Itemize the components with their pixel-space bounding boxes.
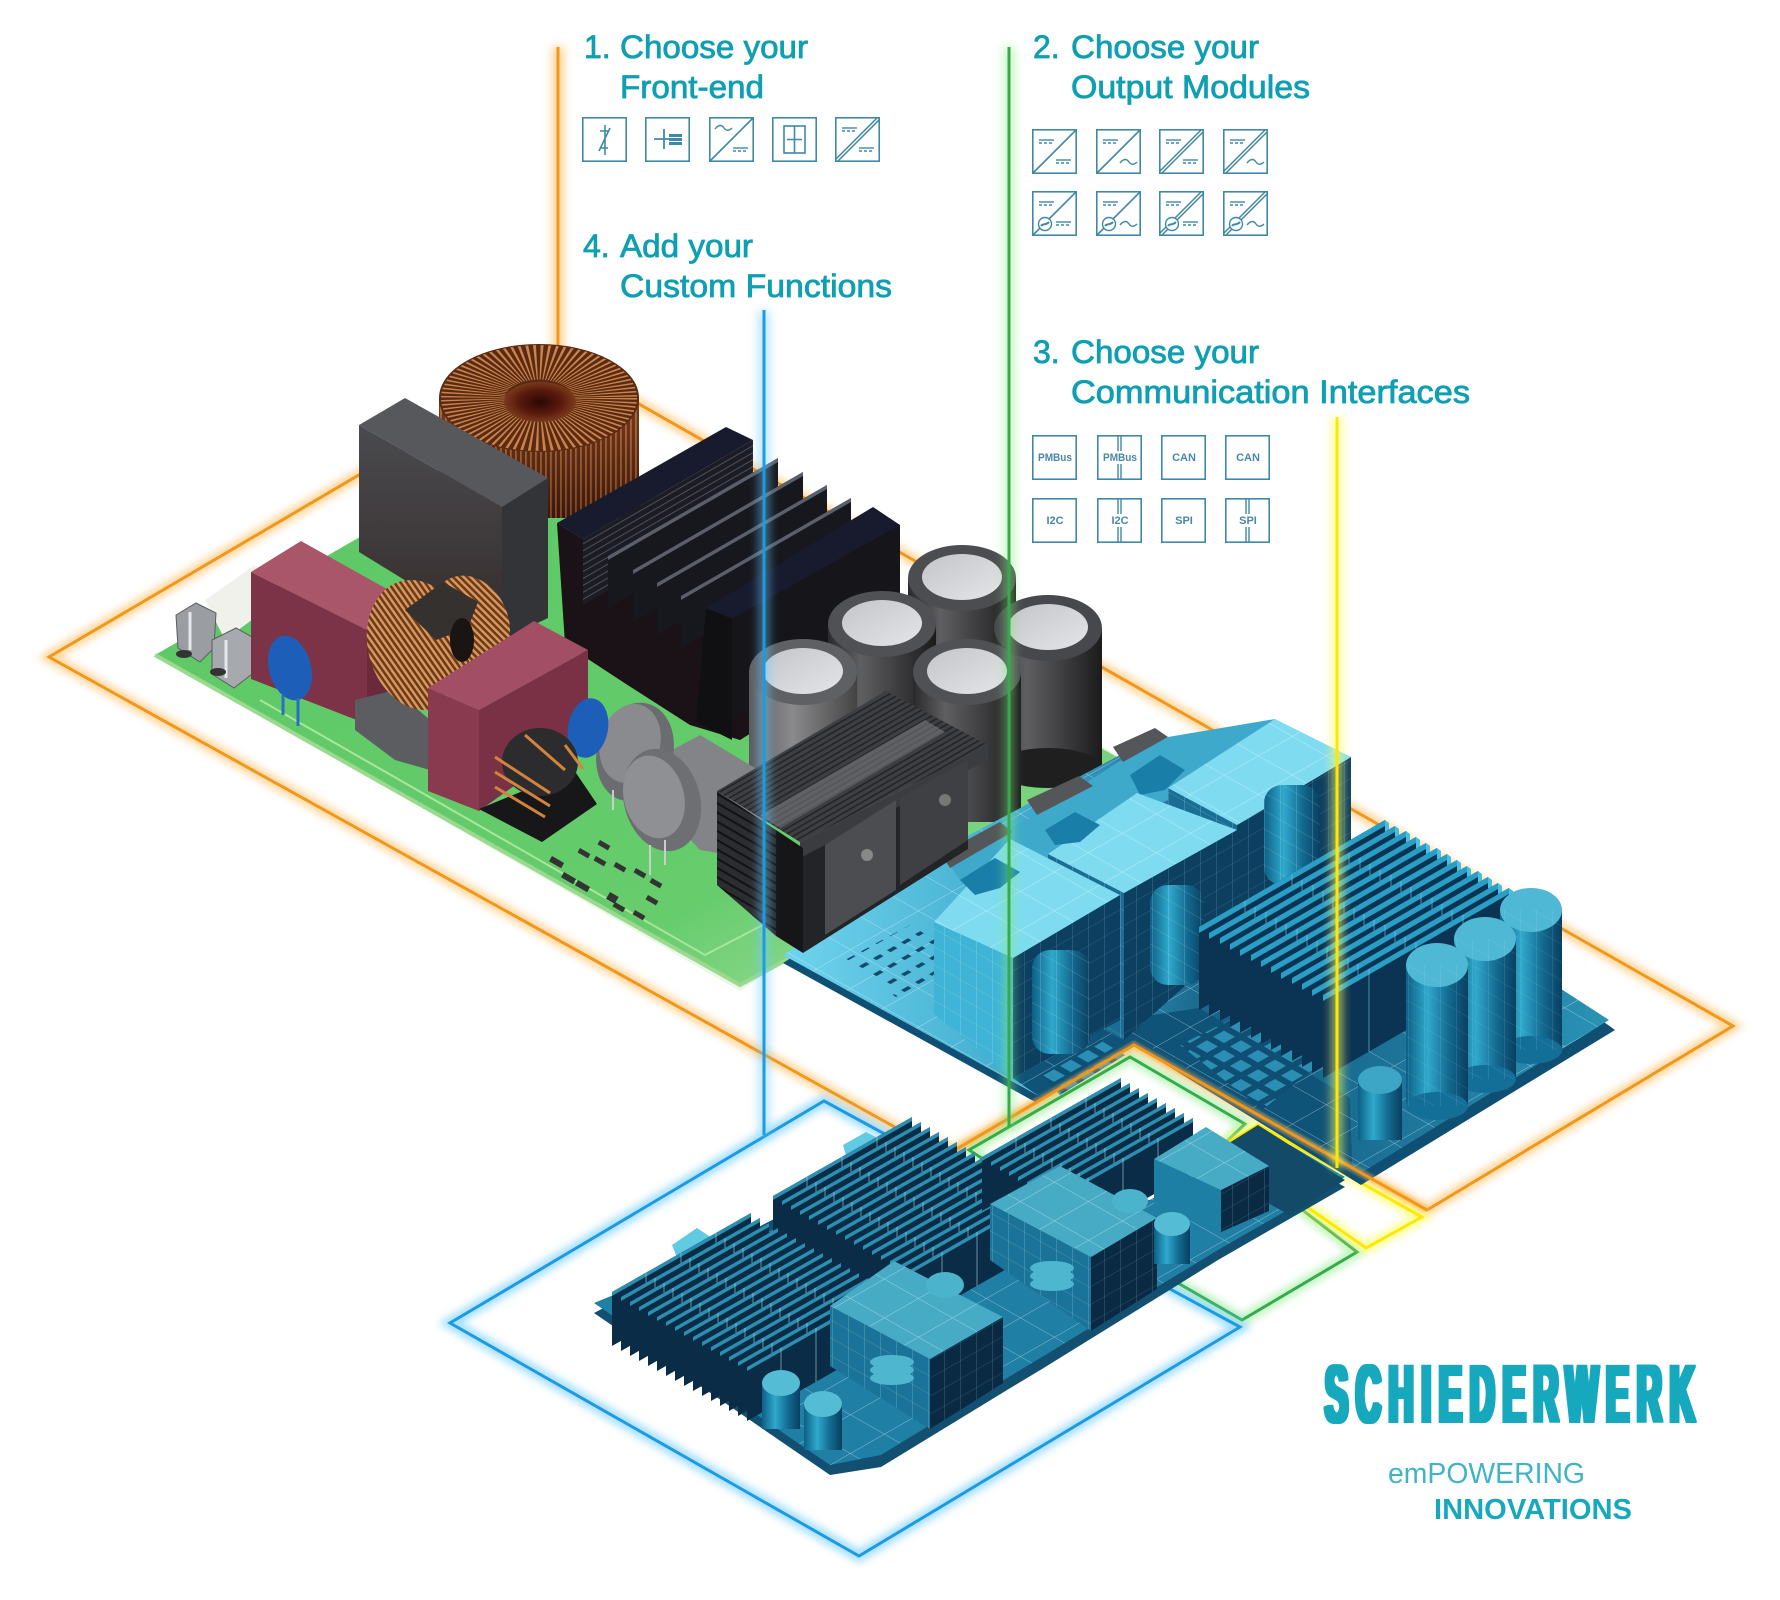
heading 2: 2.: [1033, 29, 1060, 65]
icon: DC/AC: [1097, 130, 1140, 173]
icon: SPI: [1162, 499, 1205, 542]
capacitor tall right: [994, 595, 1102, 788]
heading 3: 3.: [1033, 334, 1060, 370]
heading 3: [1033, 334, 1470, 410]
blue wireframe block C: [1130, 719, 1351, 980]
icon: capacitor and battery: [646, 118, 689, 161]
heading 4: [583, 228, 892, 304]
icon: DC/AC with galvanic symbol: [1097, 192, 1140, 235]
grey rear strips: [941, 728, 1168, 868]
icon: isolated CAN: [1226, 436, 1269, 479]
heading 1: 1.: [584, 29, 611, 65]
small cube components on blue board: [1180, 1005, 1325, 1110]
icon: isolated DC/AC: [1224, 130, 1267, 173]
yellow frame: communication interface area outline: [1221, 1125, 1422, 1248]
small toroid on black base: [479, 728, 597, 842]
icon: isolated DC/DC with galvanic symbol: [1160, 192, 1203, 235]
dark grey capacitor block: [359, 398, 548, 640]
icon group: front-end options: [583, 118, 879, 161]
heading 2: Choose your: [1071, 29, 1259, 65]
icon: isolated SPI: [1226, 499, 1269, 542]
vertical connector line: communication interfaces, yellow: [1332, 417, 1342, 1168]
icon: CAN: CAN: [1172, 452, 1196, 464]
logo: SCHIEDERWERK: SCHIEDERWERK: [1325, 1349, 1695, 1440]
blue wireframe capacitor back: [1500, 888, 1562, 1064]
cube components at front edge: [1040, 1040, 1125, 1095]
heading 1: Choose your: [620, 29, 808, 65]
blue wireframe block A: [934, 839, 1120, 1078]
capacitor front: [913, 639, 1021, 822]
icon: varistor: [583, 118, 626, 161]
green PCB board: realistic half: [155, 432, 1140, 991]
vertical connector line: custom functions, blue: [759, 310, 769, 1135]
icon: isolated SPI: SPI: [1239, 515, 1257, 527]
heading 2: [1033, 29, 1310, 105]
green frame: output module area outline: [969, 1057, 1357, 1320]
lower small capacitor beside block E: [1154, 1212, 1190, 1264]
vertical connector line: output modules, green: [1004, 47, 1014, 1127]
icon group: communication interfaces: [1033, 436, 1269, 542]
lower block F: [1154, 1127, 1269, 1232]
lower capacitors, front pair: [762, 1370, 842, 1450]
copper toroid inductor, large: [439, 344, 639, 518]
rear black heat sink: [557, 427, 900, 740]
icon: DC/DC: [1033, 130, 1076, 173]
icon: PMBus: PMBus: [1038, 452, 1072, 464]
icon: isolated DC/DC: [1160, 130, 1203, 173]
blue wireframe capacitor front: [1406, 943, 1468, 1120]
tagline: INNOVATIONS: INNOVATIONS: [1434, 1494, 1632, 1526]
cyan wedge joining the block backs: [945, 719, 1275, 880]
orange frame overlay on blue board: [955, 1045, 1427, 1210]
capacitor back: [908, 545, 1016, 708]
icon: SPI: SPI: [1175, 515, 1193, 527]
blue frame: custom functions area outline: [450, 1101, 1240, 1556]
lower block D with coil: [830, 1261, 1003, 1429]
vertical connector line: front-end, orange: [553, 47, 563, 362]
SMD parts on green PCB: [549, 840, 662, 920]
icon: CAN: [1162, 436, 1205, 479]
small cyan connector blocks: [672, 1132, 1060, 1275]
blue disc capacitor left: [261, 631, 319, 726]
front black heat sink with transistors: [717, 691, 988, 953]
icon: isolated CAN: CAN: [1236, 452, 1260, 464]
copper coil choke: [353, 562, 525, 722]
heading 1: Front-end: [620, 69, 764, 105]
icon: DC/DC with galvanic symbol: [1033, 192, 1076, 235]
heading 4: 4.: [583, 228, 610, 264]
grey mode choke base: [355, 690, 430, 770]
icon: isolated I2C: [1098, 499, 1141, 542]
blue wireframe small capacitor on board: [1358, 1066, 1402, 1140]
lower heat sink fins, front group: [612, 1213, 886, 1421]
blue wireframe capacitor middle: [1454, 917, 1516, 1093]
lower block E with coil: [990, 1166, 1157, 1331]
capacitor left: [749, 639, 857, 802]
blue wireframe board: [783, 719, 1615, 1185]
left red filter block: [251, 541, 396, 724]
icon: isolated DC to DC: [836, 118, 879, 161]
icon: isolated DC/AC with galvanic symbol: [1224, 192, 1267, 235]
heading 1: [584, 29, 808, 105]
lower heat sink fins, upper right group: [982, 1078, 1193, 1251]
dark base under the fins: [1013, 1008, 1352, 1165]
icon: isolated PMBus: [1098, 436, 1141, 479]
icon group: output modules: [1033, 130, 1267, 235]
fuse and clips: [176, 565, 265, 688]
orange frame: front-end area outline: [49, 358, 1733, 1210]
heading 3: Choose your: [1071, 334, 1259, 370]
lower custom-function module base: [594, 1125, 1345, 1475]
electrolytic capacitors, five grey cans: [749, 545, 1102, 822]
heading 4: Custom Functions: [620, 268, 892, 304]
tagline: emPOWERING: emPOWERING: [1388, 1458, 1585, 1490]
blue wireframe heat sink fins: [1199, 820, 1513, 1078]
blue disc capacitor right: [563, 695, 613, 761]
lower heat sink fins, rear group: [773, 1117, 1047, 1325]
blue wireframe block B: [1045, 793, 1237, 1040]
icon: I2C: I2C: [1046, 515, 1064, 527]
heading 3: Communication Interfaces: [1071, 374, 1470, 410]
capacitor middle: [828, 591, 936, 754]
icon: AC to DC: [710, 118, 753, 161]
SMD cluster on blue board: [845, 925, 960, 1000]
icon: isolated PMBus: PMBus: [1103, 452, 1137, 464]
icon: isolated I2C: I2C: [1111, 515, 1129, 527]
icon: I2C: [1033, 499, 1076, 542]
heading 2: Output Modules: [1071, 69, 1310, 105]
grey varistor body and discs: [585, 694, 775, 875]
icon: fused box: [773, 118, 816, 161]
heading 4: Add your: [620, 228, 753, 264]
right red filter block: [428, 621, 588, 811]
icon: PMBus: [1033, 436, 1076, 479]
